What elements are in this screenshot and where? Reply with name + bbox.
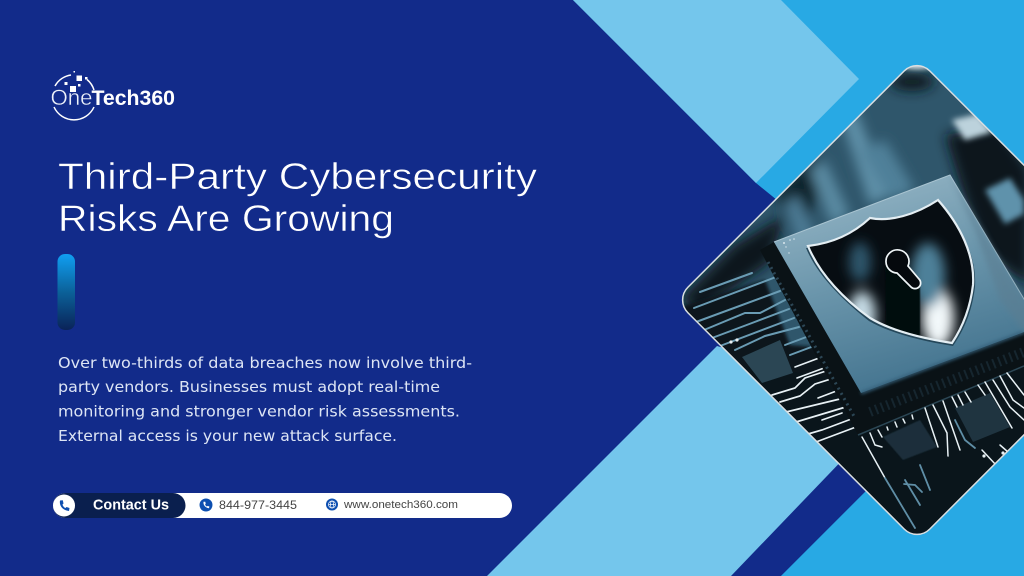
blurred light squares bbox=[901, 59, 1024, 224]
shape: light blue top diamond bbox=[573, 0, 859, 183]
logo wordmark: One bbox=[50, 85, 92, 110]
website: www.onetech360.com bbox=[343, 499, 458, 511]
logo ring bbox=[54, 75, 94, 120]
small chip left bbox=[742, 340, 793, 383]
icon: phone bbox=[200, 498, 212, 512]
lower chips bbox=[883, 420, 937, 460]
keyhole column bbox=[885, 278, 921, 336]
logo squares bbox=[64, 71, 88, 92]
photo frame bbox=[675, 58, 1024, 542]
lower traces bbox=[862, 373, 1024, 528]
left traces bbox=[694, 273, 856, 442]
chip side dark band bbox=[760, 242, 1024, 435]
shape: bright blue lower right bbox=[781, 333, 1024, 576]
dark contact pill bbox=[53, 493, 186, 518]
chip side texture bbox=[768, 262, 1024, 418]
photo backdrop bbox=[684, 66, 1024, 348]
shield outline bbox=[808, 200, 973, 343]
blue-grey traces bbox=[694, 273, 814, 355]
shield interior bbox=[809, 202, 972, 342]
plate soft bottom edge bbox=[861, 332, 1024, 393]
icon: globe bbox=[326, 498, 338, 510]
line 1: Over two-thirds of data breaches now involve third- bbox=[58, 354, 472, 372]
shield bbox=[806, 198, 976, 346]
node dots bbox=[729, 338, 1005, 458]
shape: light blue lower diagonal band bbox=[487, 346, 900, 576]
keyhole bbox=[886, 250, 921, 289]
plate corner dots bbox=[783, 238, 795, 254]
blue lower traces bbox=[885, 420, 975, 528]
white lower traces bbox=[862, 373, 1024, 478]
line 2: party vendors. Businesses must adopt real-time bbox=[58, 378, 440, 396]
accent pill bbox=[58, 254, 75, 330]
icon: phone badge bbox=[53, 494, 75, 516]
title bbox=[58, 155, 537, 239]
body paragraph bbox=[58, 354, 472, 445]
line 3: monitoring and stronger vendor risk assessments. bbox=[58, 402, 460, 420]
title line 1: Third-Party Cybersecurity bbox=[58, 155, 537, 197]
blurred upper circuit board bbox=[680, 73, 1024, 312]
plate edge highlight bbox=[774, 174, 1024, 300]
shape: bright blue right area bbox=[573, 0, 1024, 576]
photo: shield on circuit chip, rounded diamond bbox=[683, 66, 1024, 534]
shield outer shadow bbox=[806, 247, 976, 346]
line 4: External access is your new attack surface. bbox=[58, 427, 397, 445]
contact bar bbox=[53, 493, 512, 518]
plate blur to dark bbox=[956, 184, 1024, 333]
logo wordmark bold: Tech360 bbox=[92, 87, 175, 110]
phone number: 844-977-3445 bbox=[219, 500, 297, 512]
shape: navy lower diagonal block bbox=[480, 300, 1024, 576]
logo: OneTech360 bbox=[50, 71, 175, 120]
white bar bbox=[53, 493, 512, 518]
circuit line below chip bbox=[858, 366, 1024, 435]
chip top plate bbox=[774, 175, 1024, 393]
title line 2: Risks Are Growing bbox=[58, 197, 394, 239]
contact label: Contact Us bbox=[93, 496, 169, 514]
white traces bbox=[772, 358, 856, 442]
lower dark board bbox=[684, 278, 853, 379]
